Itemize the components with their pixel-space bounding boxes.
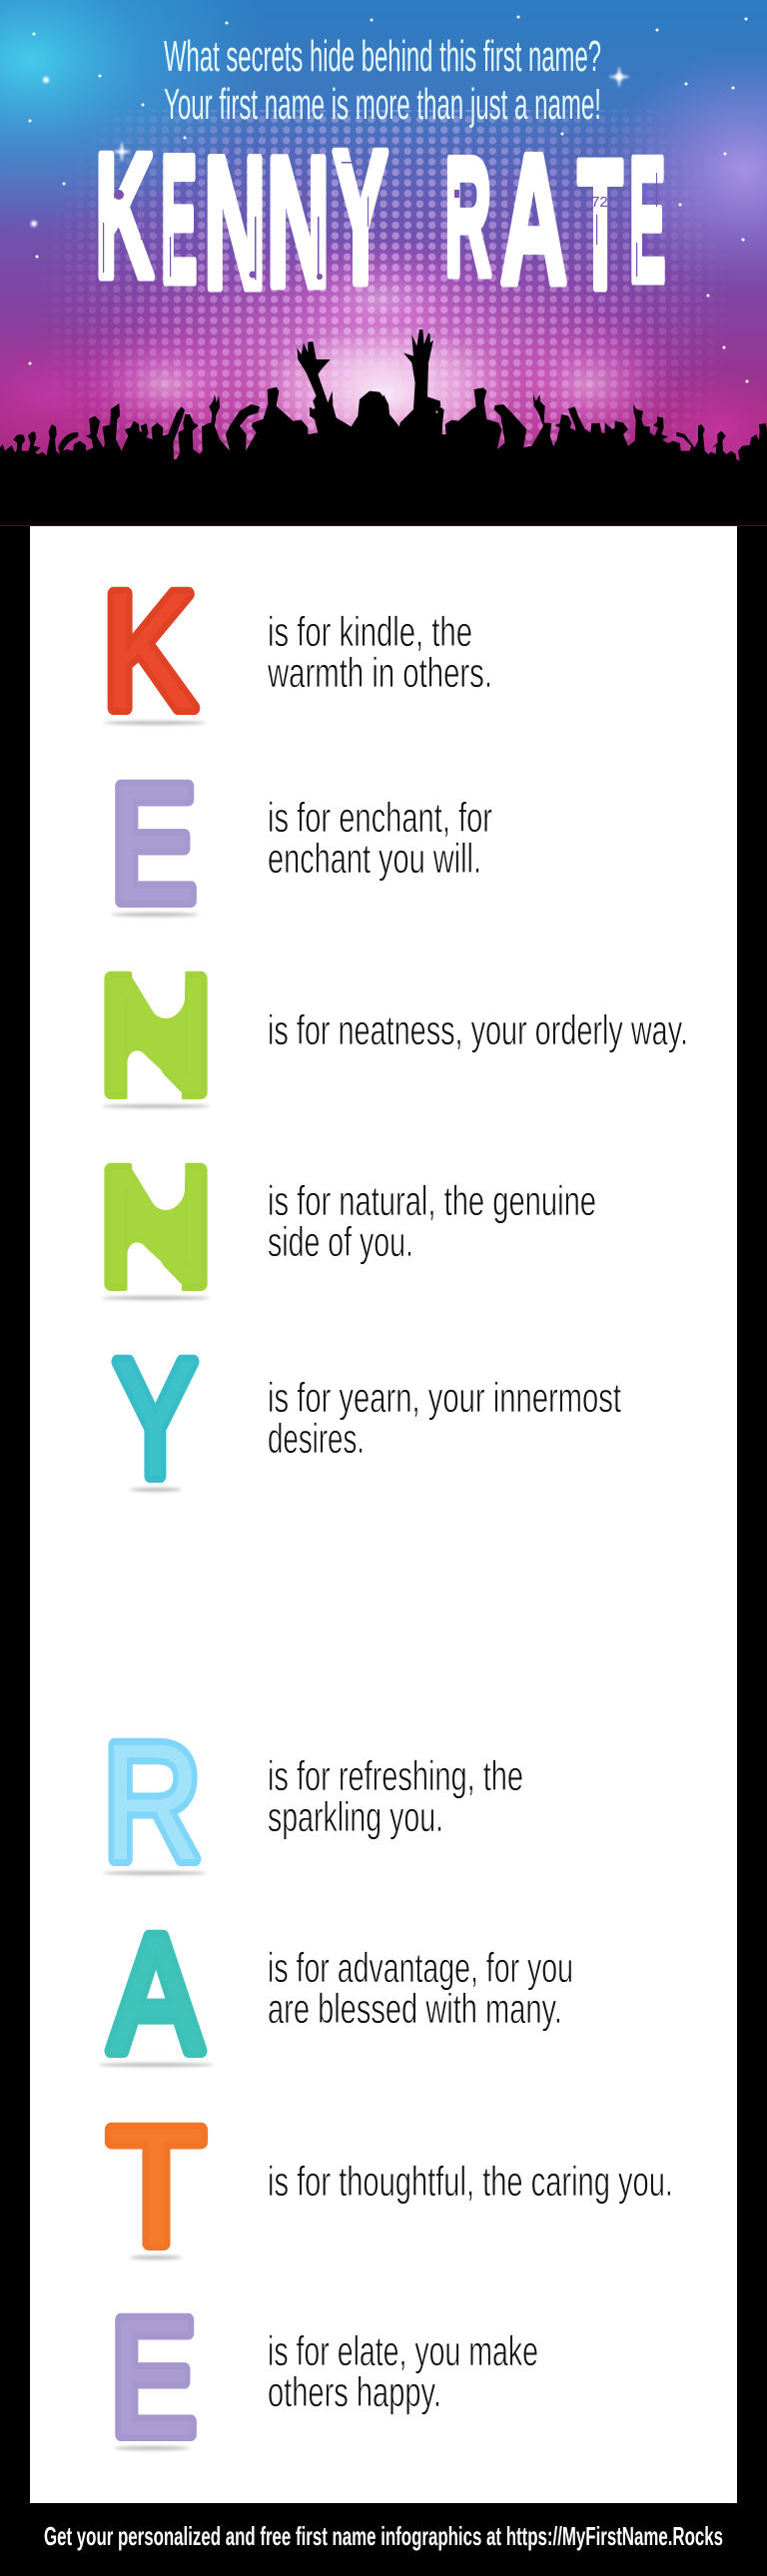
row: R	[103, 1710, 523, 1895]
row: R: is for refreshing, the	[268, 1752, 523, 1799]
row: N: side of you.	[268, 1218, 413, 1265]
title: name: K	[95, 117, 154, 315]
row: N	[98, 944, 688, 1128]
title: name: E	[161, 119, 198, 321]
panel: letters	[30, 526, 737, 2503]
row: N: N	[98, 1135, 214, 1320]
row: E: is for enchant, for	[268, 794, 492, 841]
title: name: 72	[591, 194, 608, 211]
row: K: is for kindle, the	[268, 608, 472, 655]
row: Y: Y	[114, 1327, 197, 1512]
row: E: enchant you will.	[268, 835, 481, 882]
title: name: A	[500, 116, 567, 322]
crowd silhouette right	[384, 329, 767, 526]
row: E	[110, 752, 492, 937]
row: N: is for natural, the genuine	[268, 1177, 596, 1224]
sparkles	[28, 16, 749, 383]
row: R: R	[103, 1710, 202, 1895]
title: name: N	[267, 120, 330, 325]
row: N: N	[98, 944, 214, 1128]
row: E: others happy.	[268, 2368, 441, 2415]
row: Y: desires.	[268, 1415, 365, 1462]
panel: hero banner: E	[629, 121, 665, 319]
row: E: is for elate, you make	[268, 2327, 538, 2374]
row: T: T	[108, 2095, 205, 2279]
crowd silhouette left	[0, 341, 384, 526]
title: name	[98, 148, 665, 292]
row: T	[108, 2095, 673, 2279]
row: K	[102, 559, 492, 744]
title: name: Y	[333, 112, 388, 323]
row: R: sparkling you.	[268, 1793, 443, 1840]
row: A: A	[110, 1902, 202, 2087]
row: E: E	[110, 752, 197, 937]
row: E: E	[110, 2285, 197, 2470]
row: Y: is for yearn, your innermost	[268, 1374, 621, 1421]
row: K: warmth in others.	[267, 649, 492, 696]
row: A: are blessed with many.	[268, 1985, 562, 2032]
title: name: R	[444, 123, 491, 311]
title: name: T	[577, 122, 623, 326]
row: A	[98, 1902, 573, 2087]
panel: hero banner	[0, 0, 767, 526]
row: N	[98, 1135, 596, 1320]
row: Y	[114, 1327, 621, 1512]
row: K: K	[102, 559, 196, 744]
stage background	[0, 0, 767, 526]
row: A: is for advantage, for you	[268, 1944, 573, 1991]
subtitle	[164, 32, 601, 129]
title: name: N	[204, 118, 266, 327]
row: E	[110, 2285, 538, 2470]
